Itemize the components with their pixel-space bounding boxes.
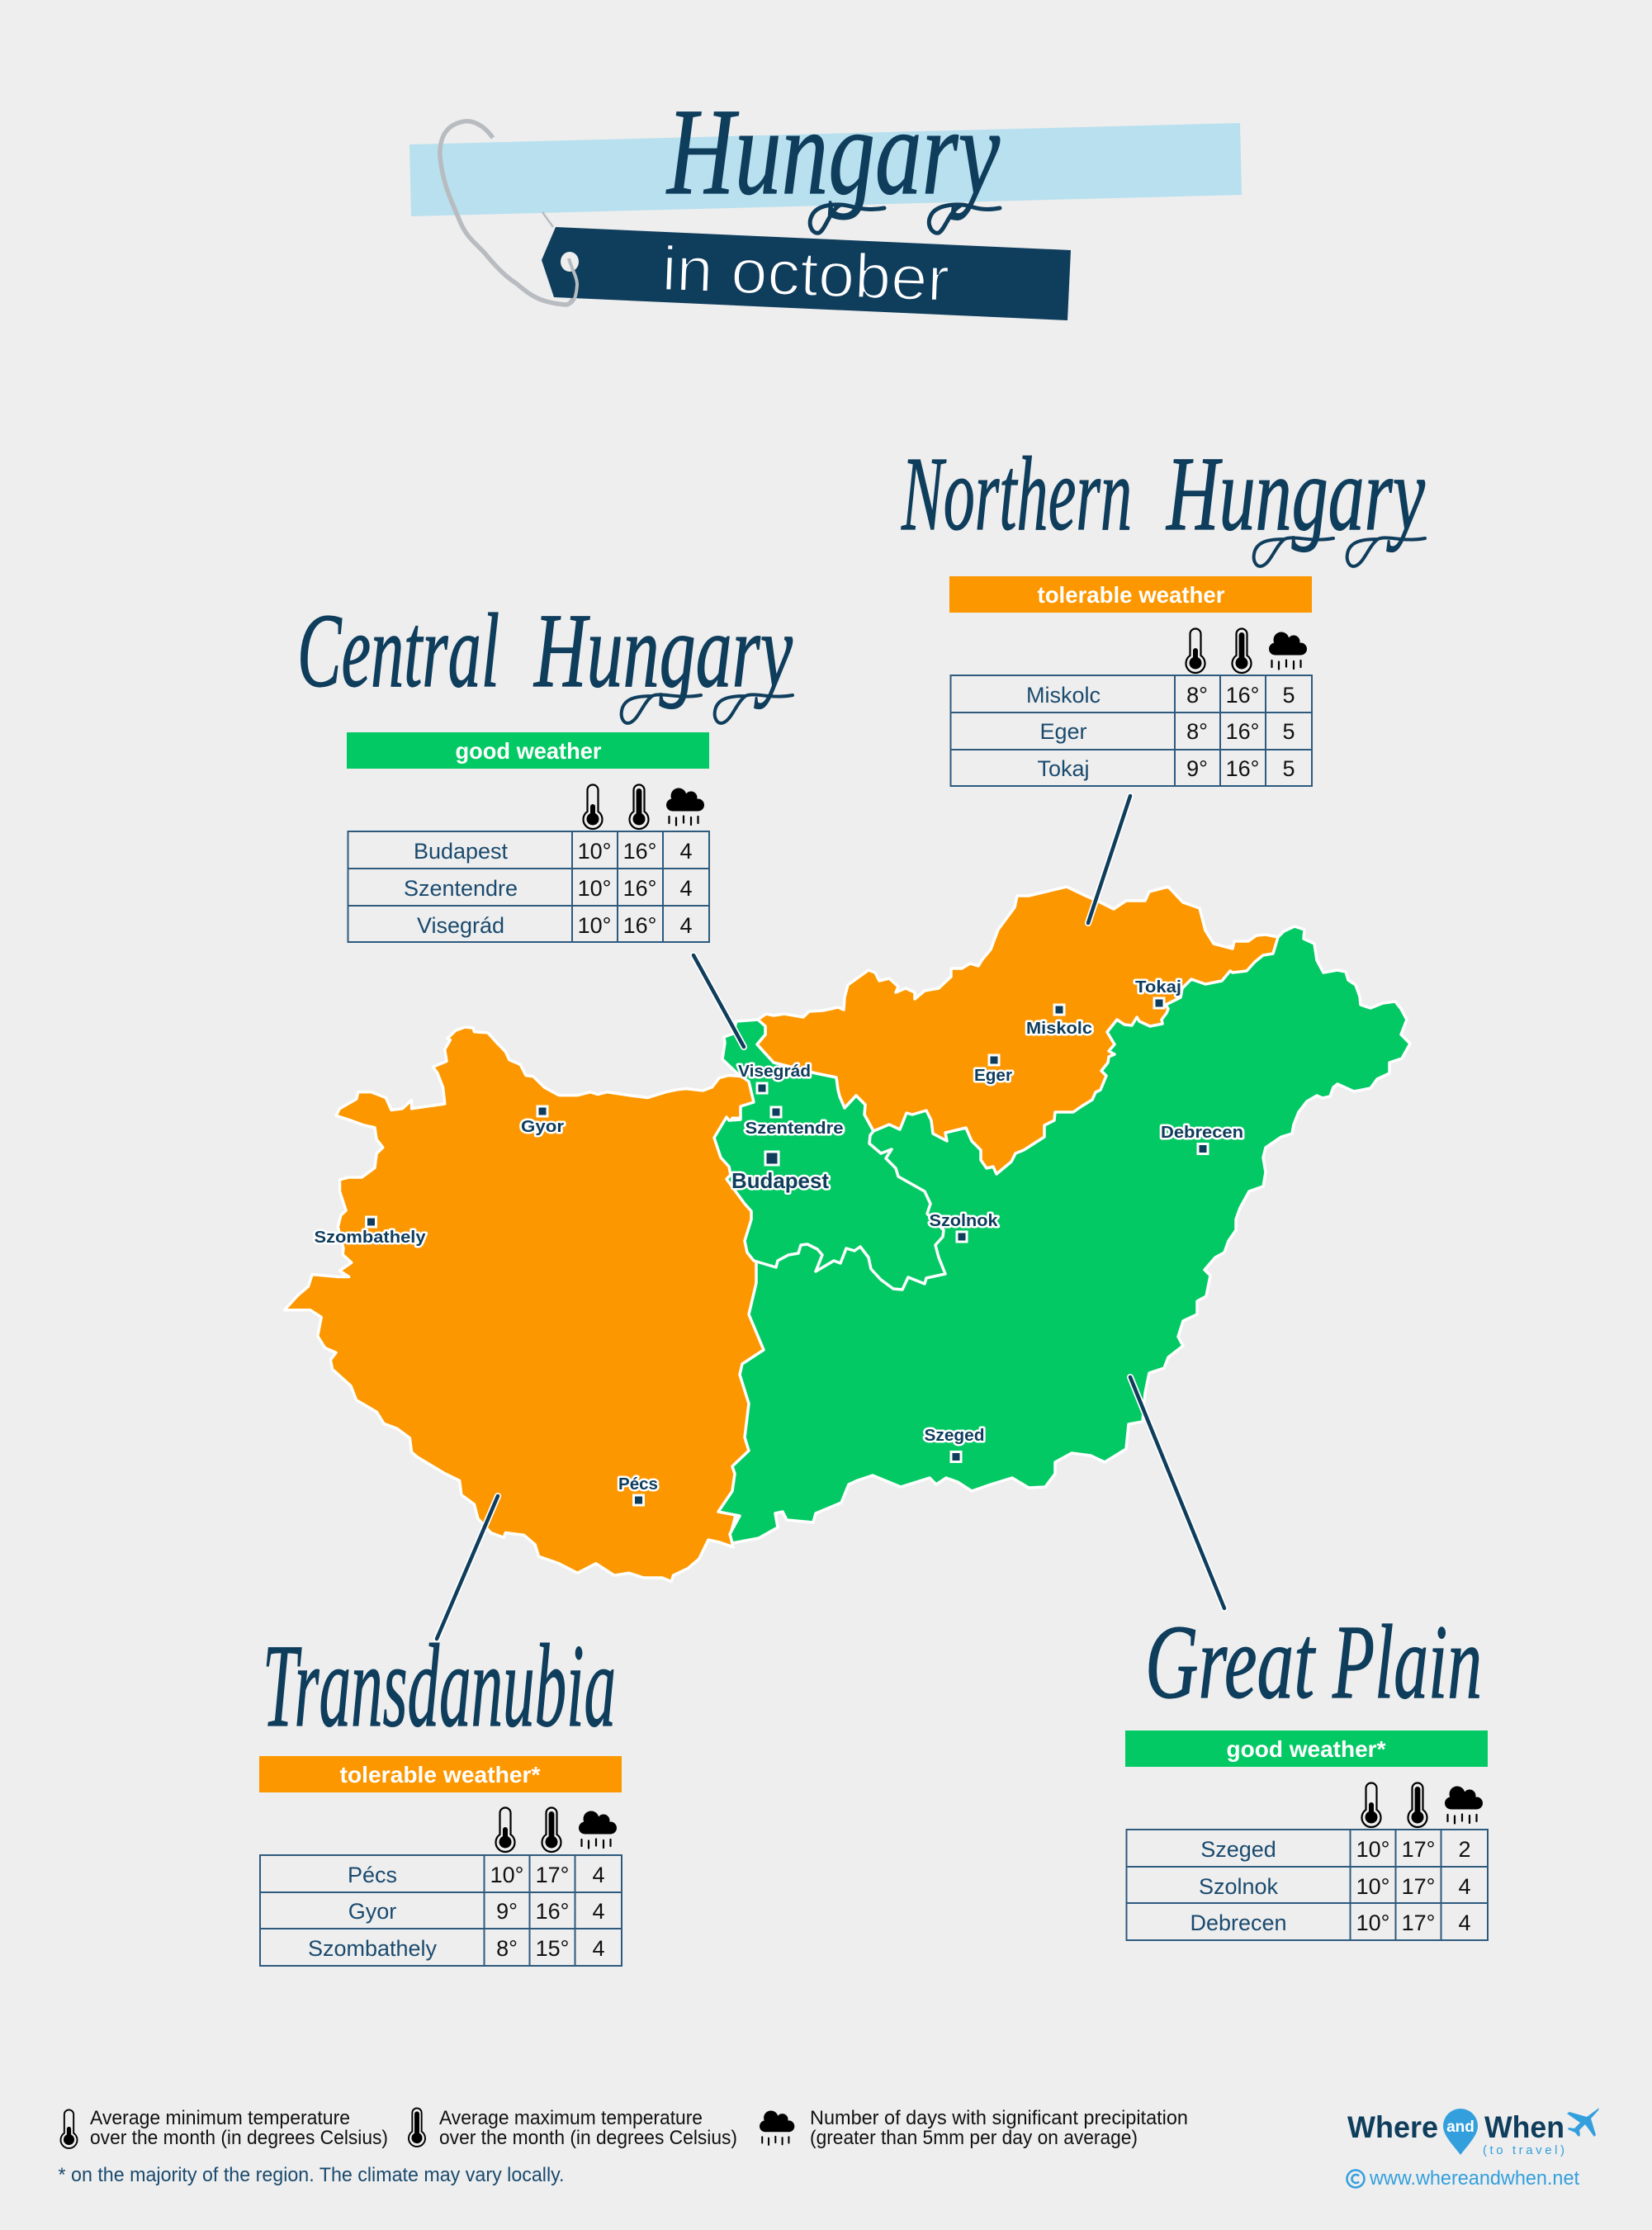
icon: minimum temperature — [583, 784, 603, 829]
heading: Great Plain: Plain — [1332, 1603, 1482, 1721]
panel: Great Plain — [1125, 1603, 1488, 1940]
weather bar: tolerable weather — [1037, 582, 1225, 608]
label: Szentendre: Szentendre — [745, 1120, 844, 1138]
tag string back — [542, 212, 553, 227]
climate table: 4 — [679, 876, 693, 901]
weather bar — [259, 1756, 622, 1792]
legend text: minimum temperature: Average minimum temperature — [90, 2107, 350, 2129]
logo tagline: (to travel) — [1483, 2143, 1564, 2157]
climate table: 16° — [623, 876, 656, 901]
legend text: precipitation — [810, 2107, 1188, 2149]
weather bar — [1125, 1730, 1488, 1767]
climate table: 17° — [1402, 1910, 1435, 1935]
label: Budapest: Budapest — [731, 1168, 829, 1193]
climate table: 16° — [1226, 683, 1259, 708]
climate table — [1126, 1830, 1488, 1940]
icon: maximum temperature — [1408, 1783, 1427, 1827]
climate table — [951, 675, 1312, 786]
label: Szeged: Szeged — [925, 1427, 984, 1445]
icon: legend minimum temperature — [60, 2109, 78, 2148]
climate table: 4 — [679, 839, 693, 864]
climate table: 8° — [1186, 719, 1208, 744]
label: Szolnok: Szolnok — [930, 1212, 998, 1230]
climate table: 16° — [623, 839, 656, 864]
climate table: 4 — [592, 1899, 605, 1924]
climate table: 16° — [1226, 756, 1259, 781]
title band — [409, 123, 1242, 216]
climate table: 10° — [1356, 1874, 1389, 1899]
label: Debrecen: Debrecen — [1161, 1124, 1243, 1142]
tag string front — [566, 258, 577, 305]
icon: maximum temperature — [629, 784, 649, 829]
logo: Where and When — [1347, 2108, 1599, 2190]
icon: minimum temperature — [495, 1808, 515, 1852]
tag string — [440, 121, 577, 305]
title: Hungary: Hungary — [665, 83, 1000, 220]
legend text: minimum temperature: over the month (in degrees Celsius) — [90, 2127, 388, 2149]
climate table — [260, 1855, 622, 1966]
climate table: 15° — [536, 1936, 569, 1961]
tag hole — [561, 252, 579, 272]
region: Northern Hungary — [757, 887, 1278, 1174]
heading: Central Hungary: Hungary — [533, 592, 793, 709]
panel: Northern Hungary — [901, 435, 1425, 786]
climate table: Visegrád — [417, 913, 504, 938]
climate table: Pécs — [348, 1863, 397, 1887]
heading: Transdanubia: Transdanubia — [263, 1621, 616, 1752]
label: Miskolc: Miskolc — [1026, 1020, 1092, 1038]
region: Central Hungary — [714, 1020, 945, 1290]
label: Visegrád: Visegrád — [738, 1063, 811, 1081]
legend text: maximum temperature: Average maximum temperature — [439, 2107, 703, 2129]
climate table: 16° — [1226, 719, 1259, 744]
subtitle: in october: in october — [660, 234, 950, 315]
panel: Central Hungary — [297, 592, 793, 942]
climate table: Miskolc — [1026, 683, 1101, 708]
climate table: 16° — [536, 1899, 569, 1924]
icon: legend rain — [760, 2110, 794, 2145]
weather bar: good weather* — [1227, 1736, 1386, 1762]
logo word: When: When — [1484, 2110, 1564, 2144]
climate table: 10° — [490, 1863, 523, 1887]
city markers — [367, 998, 1208, 1505]
leader line: Transdanubia — [437, 1496, 498, 1639]
climate table: Szeged — [1200, 1837, 1276, 1862]
heading: Central Hungary — [297, 592, 793, 723]
label: Tokaj: Tokaj — [1135, 978, 1181, 997]
region: Great Plain — [718, 926, 1410, 1543]
climate table: 5 — [1282, 683, 1295, 708]
climate table: 10° — [1356, 1837, 1389, 1862]
icon: rain — [666, 788, 704, 826]
climate table: 16° — [623, 913, 656, 938]
leader line: Great Plain — [1130, 1377, 1224, 1608]
climate table: Gyor — [348, 1899, 396, 1924]
heading: Northern Hungary — [901, 435, 1425, 566]
legend text: maximum temperature: over the month (in degrees Celsius) — [439, 2127, 737, 2149]
climate table: Eger — [1039, 719, 1087, 744]
climate table: 17° — [1402, 1874, 1435, 1899]
legend text: precipitation: (greater than 5mm per day on average) — [810, 2127, 1138, 2149]
legend — [58, 2107, 1188, 2186]
climate table: 4 — [592, 1936, 605, 1961]
climate table: Szolnok — [1199, 1874, 1279, 1899]
climate table: 10° — [1356, 1910, 1389, 1935]
map of Hungary — [285, 887, 1410, 1582]
climate table: 5 — [1282, 756, 1295, 781]
weather bar: tolerable weather* — [340, 1762, 541, 1787]
icon: copyright — [1347, 2170, 1364, 2188]
legend text: maximum temperature — [439, 2107, 737, 2149]
icon: map pin — [1443, 2109, 1478, 2155]
label: Gyor: Gyor — [521, 1118, 564, 1136]
website url: www.whereandwhen.net — [1369, 2167, 1579, 2190]
heading: Northern Hungary: Northern — [901, 435, 1132, 552]
region: Transdanubia — [285, 1027, 768, 1582]
climate table — [348, 831, 709, 942]
weather bar — [949, 576, 1312, 613]
icon: rain — [1269, 632, 1307, 669]
legend text: precipitation: Number of days with significant precipitation — [810, 2107, 1188, 2129]
climate table: 2 — [1458, 1837, 1471, 1862]
heading: Great Plain: Great — [1145, 1603, 1316, 1721]
title: Hungary in october tag — [409, 83, 1242, 320]
climate table: 9° — [496, 1899, 518, 1924]
weather bar: good weather — [456, 738, 602, 764]
climate table: 4 — [1458, 1874, 1471, 1899]
dark tag — [542, 227, 1071, 320]
climate table: Szentendre — [404, 876, 518, 901]
legend text: minimum temperature — [90, 2107, 388, 2149]
icon: legend maximum temperature — [409, 2108, 425, 2147]
icon: minimum temperature — [1362, 1783, 1380, 1827]
climate table: 4 — [679, 913, 693, 938]
label: Pécs: Pécs — [618, 1475, 658, 1494]
icon: rain — [1445, 1787, 1483, 1823]
icon: maximum temperature — [542, 1808, 561, 1852]
climate table: 17° — [536, 1863, 569, 1887]
climate table: 5 — [1282, 719, 1295, 744]
city labels — [314, 978, 1243, 1494]
icon: maximum temperature — [1232, 629, 1252, 673]
heading: Northern Hungary: Hungary — [1166, 435, 1425, 552]
climate table: 10° — [578, 876, 611, 901]
climate table: Budapest — [414, 839, 509, 864]
logo word: Where: Where — [1347, 2110, 1438, 2144]
climate table: Tokaj — [1037, 756, 1090, 781]
climate table: 9° — [1186, 756, 1208, 781]
leader line: Northern Hungary — [1088, 796, 1130, 923]
footnote: * on the majority of the region. The climate may vary locally. — [58, 2164, 565, 2186]
climate table: Debrecen — [1190, 1910, 1287, 1935]
climate table: 10° — [578, 913, 611, 938]
climate table: 17° — [1402, 1837, 1435, 1862]
climate table: 4 — [1458, 1910, 1471, 1935]
label: Szombathely: Szombathely — [314, 1229, 426, 1247]
climate table: 8° — [1186, 683, 1208, 708]
climate table: Szombathely — [308, 1936, 438, 1961]
climate table: 10° — [578, 839, 611, 864]
logo word: and: and — [1446, 2119, 1474, 2136]
icon: plane — [1567, 2108, 1599, 2137]
climate table: 4 — [592, 1863, 605, 1887]
weather bar — [347, 732, 709, 769]
panel: Transdanubia — [259, 1621, 622, 1966]
label: Eger: Eger — [974, 1067, 1012, 1085]
climate table: 8° — [496, 1936, 518, 1961]
heading: Central Hungary: Central — [297, 592, 499, 709]
icon: minimum temperature — [1186, 629, 1205, 673]
icon: rain — [579, 1811, 617, 1848]
leader line: Central Hungary — [693, 955, 744, 1047]
